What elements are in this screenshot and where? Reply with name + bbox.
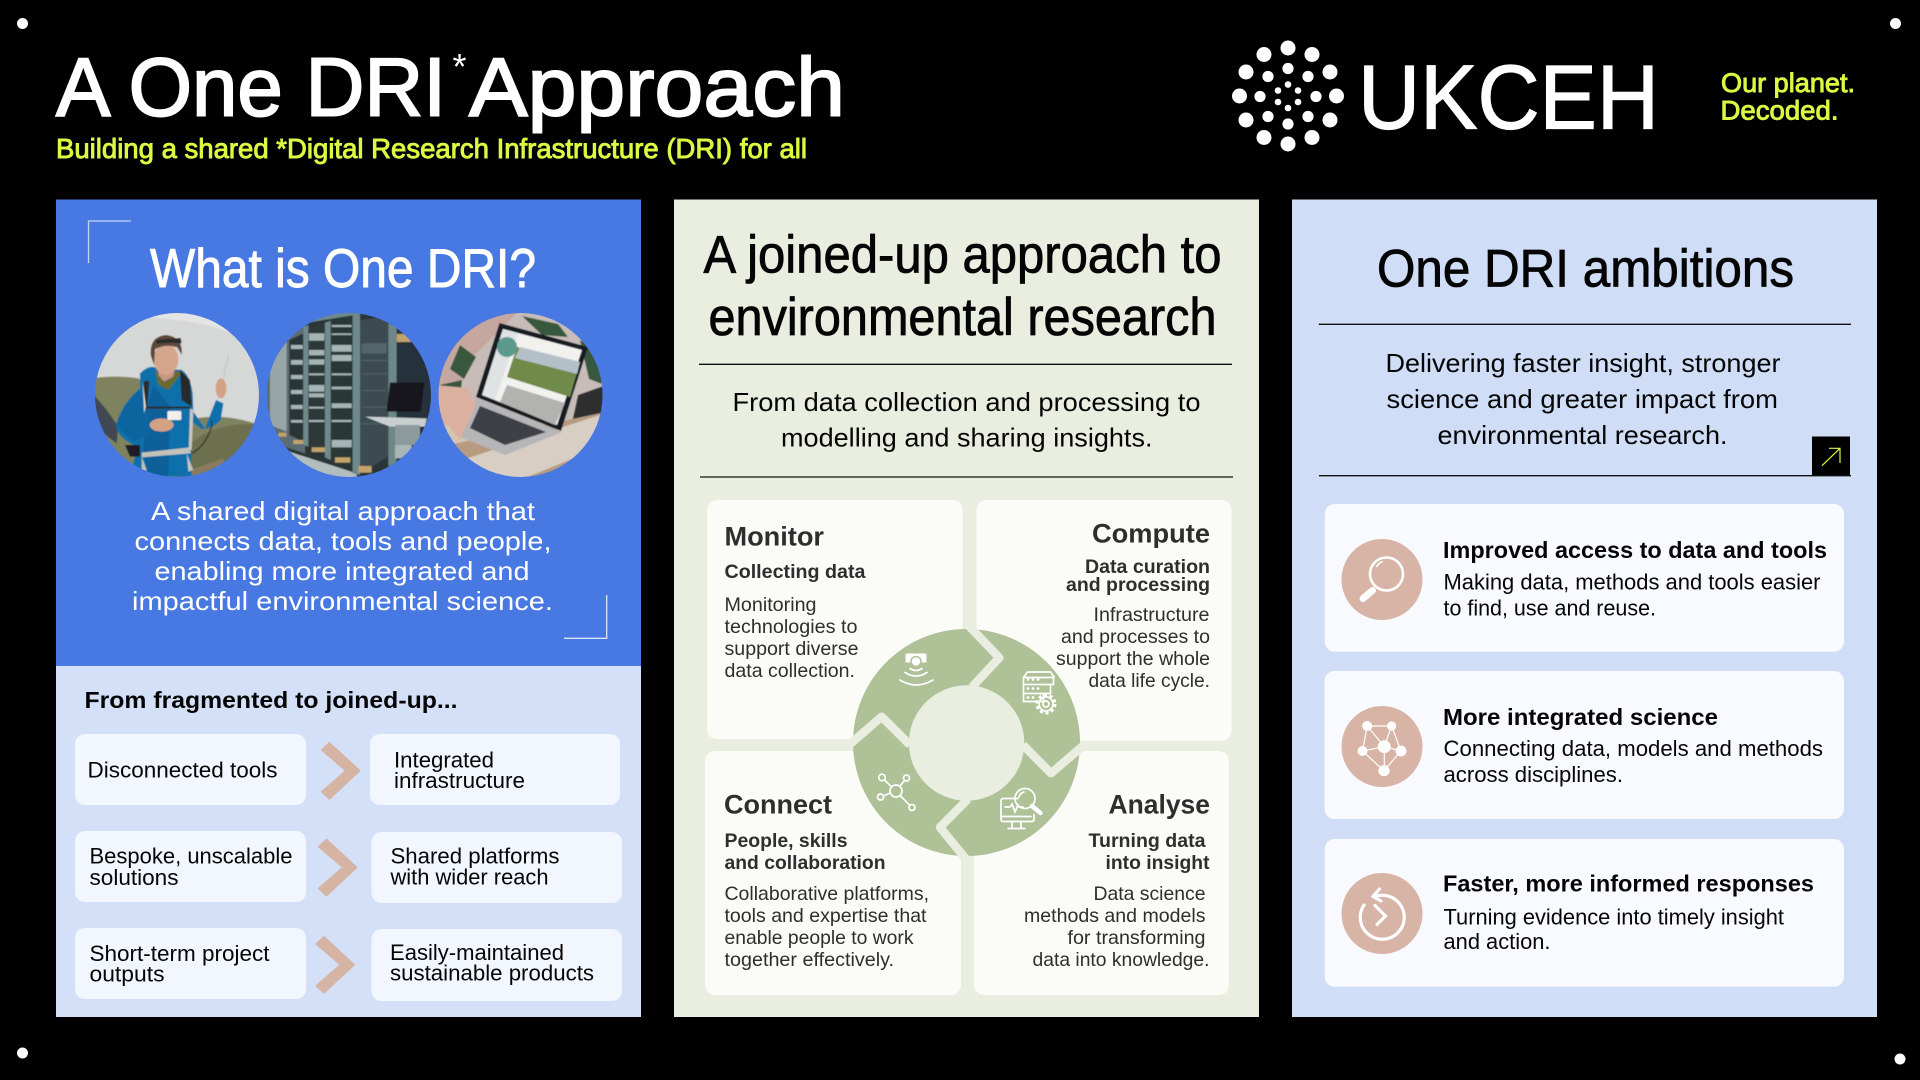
description text: A shared digital approach that — [151, 496, 536, 526]
card: more integrated science: across disciplines. — [1444, 762, 1623, 787]
description text: impactful environmental science. — [132, 586, 553, 616]
icon: monitor with magnifier — [1001, 788, 1040, 828]
cycle diagram — [849, 625, 1084, 860]
photo: server racks — [262, 310, 436, 480]
card: Analyse: methods and models — [1024, 905, 1206, 927]
card: Compute: Infrastructure — [1094, 604, 1210, 626]
card: Analyse: Turning data — [1088, 830, 1206, 852]
icon: circular arrow — [1342, 873, 1422, 954]
card: Monitor: technologies to — [724, 616, 858, 638]
card: improved access: Improved access to data and tools — [1443, 537, 1827, 563]
card: Monitor: Monitor — [724, 521, 824, 551]
photo: laptop — [434, 310, 608, 480]
card: Compute: and processing — [1066, 574, 1210, 596]
title — [56, 40, 845, 134]
heading: joined-up approach: environmental research — [708, 288, 1216, 347]
row 1: Integrated — [394, 748, 494, 772]
tagline: Our planet. — [1721, 68, 1855, 98]
card: Connect: and collaboration — [724, 852, 886, 874]
card: Analyse: data into knowledge. — [1032, 949, 1210, 971]
card: faster responses: and action. — [1444, 929, 1550, 954]
row 1: infrastructure — [394, 768, 525, 793]
card: Analyse: into insight — [1106, 852, 1210, 874]
row 3 — [75, 928, 622, 1001]
card: Connect — [705, 751, 961, 995]
icon: connected nodes — [878, 774, 915, 810]
logo wordmark: UKCEH — [1358, 48, 1659, 149]
logo mark: dotted circle — [1232, 40, 1344, 152]
card: more integrated science — [1324, 671, 1844, 819]
row 2 — [75, 831, 622, 903]
intro text: modelling and sharing insights. — [781, 423, 1152, 453]
card: faster responses: Turning evidence into timely insight — [1444, 904, 1785, 929]
description text: connects data, tools and people, — [134, 526, 552, 556]
intro text: science and greater impact from — [1386, 384, 1778, 414]
row 1 — [75, 734, 620, 805]
subtitle: Building a shared *Digital Research Infrastructure (DRI) for all — [56, 133, 807, 164]
card: Connect: Connect — [724, 789, 832, 819]
heading: joined-up approach: A joined-up approach to — [704, 226, 1222, 285]
card: improved access: Making data, methods and tools easier — [1444, 569, 1821, 594]
row 2: with wider reach — [390, 865, 548, 890]
icon: network — [1342, 706, 1422, 787]
card: Monitor: Monitoring — [724, 594, 816, 616]
card: more integrated science: Connecting data, models and methods — [1444, 736, 1823, 761]
row 2: Shared platforms — [390, 844, 560, 869]
row 3: Short-term project — [90, 941, 270, 966]
tagline: Decoded. — [1720, 96, 1838, 126]
row 2: Bespoke, unscalable — [90, 844, 292, 869]
row 3: Easily-maintained — [390, 940, 564, 965]
card: Connect: together effectively. — [724, 949, 894, 971]
row 3: outputs — [90, 962, 164, 987]
card: Compute: support the whole — [1056, 648, 1210, 670]
heading: What is One DRI?: What is One DRI? — [150, 238, 536, 299]
tagline — [1720, 68, 1855, 126]
card: Monitor — [707, 500, 963, 739]
card: Analyse: Analyse — [1108, 789, 1210, 819]
icon: magnifier — [1342, 539, 1422, 620]
heading: from fragmented: From fragmented to joined-up... — [84, 687, 457, 713]
intro text — [732, 387, 1200, 453]
card: Compute — [976, 500, 1232, 741]
card: Monitor: data collection. — [724, 660, 855, 682]
corner bracket bottom-right — [564, 595, 607, 638]
card: improved access — [1325, 504, 1844, 652]
card: Connect: enable people to work — [724, 927, 914, 949]
description text: enabling more integrated and — [154, 556, 530, 586]
card: Connect: Collaborative platforms, — [724, 883, 929, 905]
row 2: solutions — [90, 865, 178, 890]
intro text: From data collection and processing to — [732, 387, 1200, 417]
card: Compute: and processes to — [1061, 626, 1210, 648]
description text — [132, 496, 553, 616]
card: Monitor: support diverse — [724, 638, 858, 660]
panel: joined-up approach — [674, 200, 1259, 1017]
arrow button — [1812, 436, 1850, 475]
icon: server with gear — [1024, 672, 1054, 712]
card: Compute: data life cycle. — [1088, 670, 1210, 692]
panel: One DRI ambitions — [1292, 200, 1877, 1017]
row 3: sustainable products — [390, 961, 594, 986]
panel: from fragmented to joined-up — [56, 666, 641, 1017]
photo: field researcher — [90, 310, 264, 480]
card: improved access: to find, use and reuse. — [1444, 595, 1656, 620]
title: A One DRI — [56, 40, 446, 134]
card: more integrated science: More integrated science — [1443, 704, 1718, 730]
corner bracket top-left — [88, 221, 131, 263]
intro text: Delivering faster insight, stronger — [1386, 348, 1781, 378]
intro text: environmental research. — [1438, 420, 1728, 450]
heading: One DRI ambitions: One DRI ambitions — [1377, 240, 1794, 299]
panel: what is One DRI — [56, 200, 641, 666]
title: Approach — [469, 40, 845, 134]
card: Connect: tools and expertise that — [724, 905, 927, 927]
card: Analyse — [974, 751, 1229, 995]
card: Compute: Compute — [1092, 519, 1210, 549]
icon: sensor signal — [900, 654, 933, 685]
intro text — [1386, 348, 1781, 450]
title: * — [452, 46, 467, 87]
card: Analyse: Data science — [1094, 883, 1206, 905]
heading: joined-up approach — [704, 226, 1222, 347]
row 1: Disconnected tools — [88, 758, 278, 782]
card: Analyse: for transforming — [1068, 927, 1206, 949]
card: Connect: People, skills — [724, 830, 848, 852]
card: faster responses — [1325, 839, 1844, 987]
card: Compute: Data curation — [1085, 556, 1210, 578]
logo: UKCEH — [1232, 40, 1659, 152]
card: faster responses: Faster, more informed responses — [1443, 871, 1814, 897]
card: Monitor: Collecting data — [724, 561, 866, 583]
